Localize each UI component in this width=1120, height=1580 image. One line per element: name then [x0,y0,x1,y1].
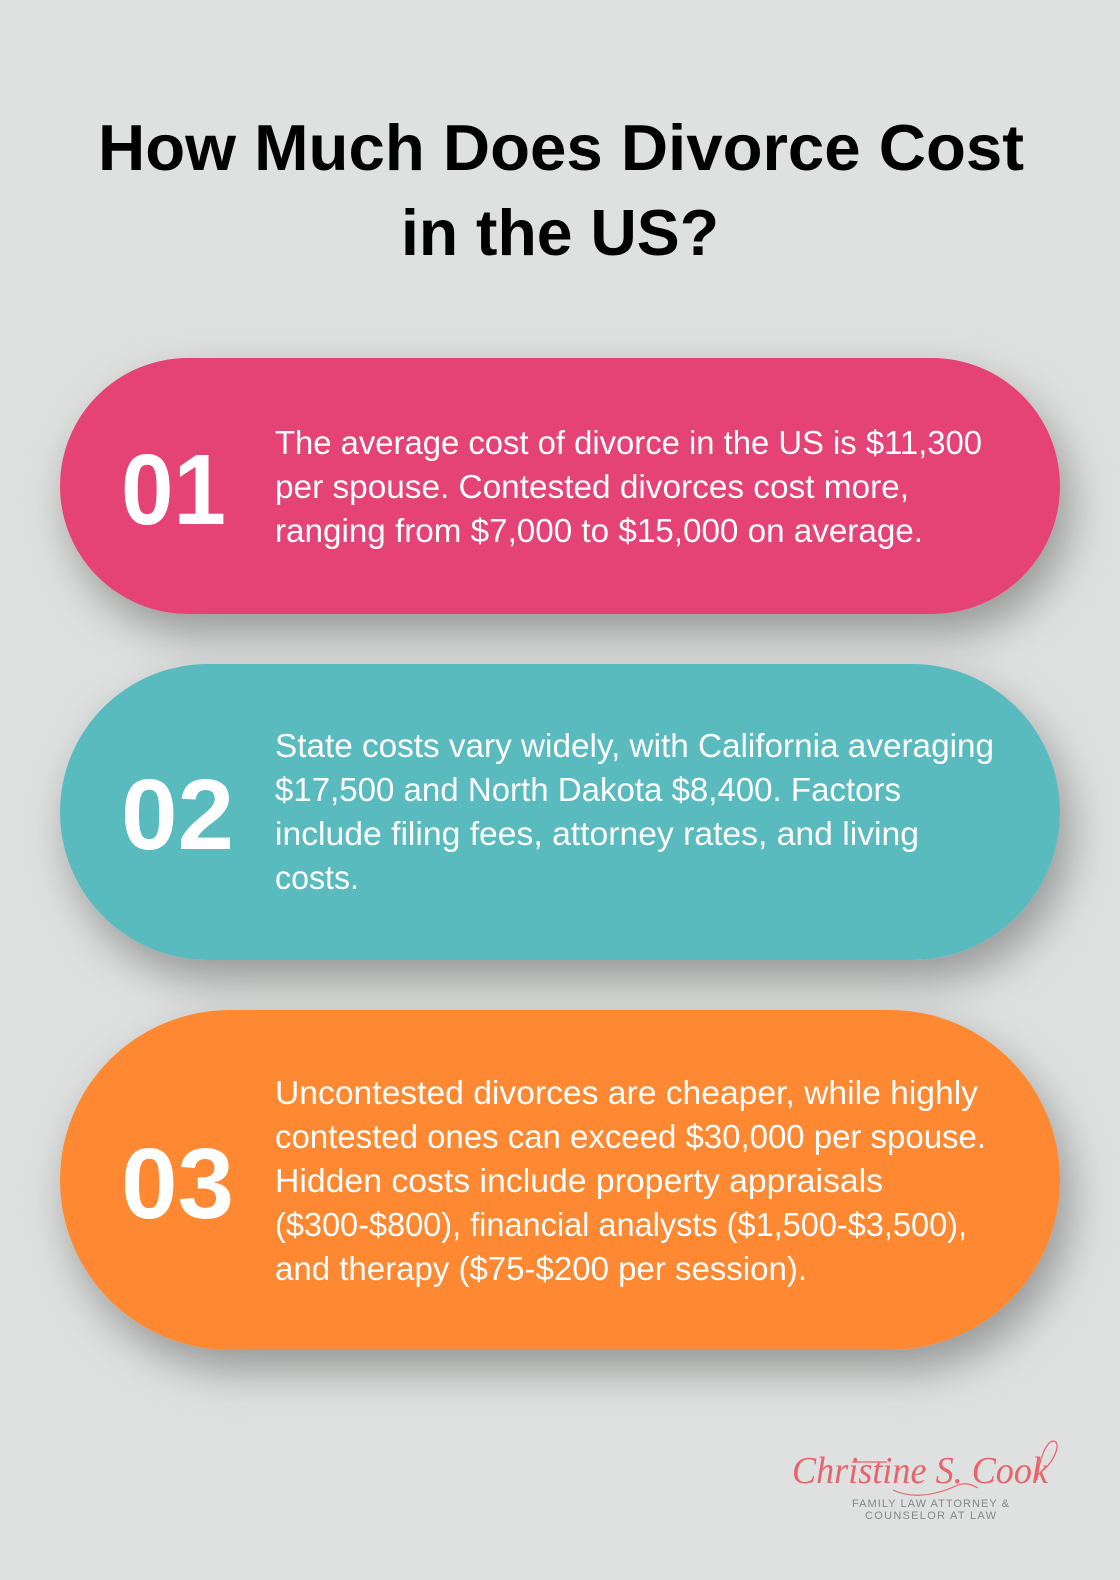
pill background: pink [60,358,1060,614]
panel: step 03 [60,1010,1060,1350]
panel: step 02 [60,664,1060,960]
logo tagline: COUNSELOR AT LAW [865,1510,997,1522]
text: contested and hidden costs: ($300-$800), financial analysts ($1,500-$3,500), [275,1206,967,1243]
text: contested and hidden costs: Uncontested divorces are cheaper, while highly [275,1074,979,1111]
title [98,111,1024,269]
text: state costs: include filing fees, attorney rates, and living [275,815,919,852]
title: in the US? [401,196,719,269]
text: state costs: State costs vary widely, with California averaging [275,727,994,764]
logo tagline [852,1498,1010,1522]
text: contested and hidden costs: contested ones can exceed $30,000 per spouse. [275,1118,986,1155]
text: average cost [275,424,982,549]
title: How Much Does Divorce Cost [98,111,1024,184]
text: average cost: The average cost of divorce in the US is $11,300 [275,424,982,461]
text: average cost: per spouse. Contested divorces cost more, [275,468,909,505]
logo signature: Christine S. Cook [792,1450,1049,1492]
panel: step 01 [60,358,1060,614]
text: contested and hidden costs: Hidden costs include property appraisals [275,1162,883,1199]
number 03: 03 [121,1128,234,1240]
text: state costs [275,727,994,896]
logo swash [852,1441,1057,1495]
logo: Christine S. Cook [792,1441,1057,1522]
number 01: 01 [121,434,226,546]
pill background: teal [60,664,1060,960]
text: contested and hidden costs [275,1074,986,1287]
logo tagline: FAMILY LAW ATTORNEY & [852,1498,1010,1510]
text: state costs: costs. [275,859,359,896]
number 02: 02 [121,759,234,871]
text: average cost: ranging from $7,000 to $15,000 on average. [275,512,923,549]
pill background: orange [60,1010,1060,1350]
text: state costs: $17,500 and North Dakota $8,400. Factors [275,771,901,808]
text: contested and hidden costs: and therapy ($75-$200 per session). [275,1250,807,1287]
